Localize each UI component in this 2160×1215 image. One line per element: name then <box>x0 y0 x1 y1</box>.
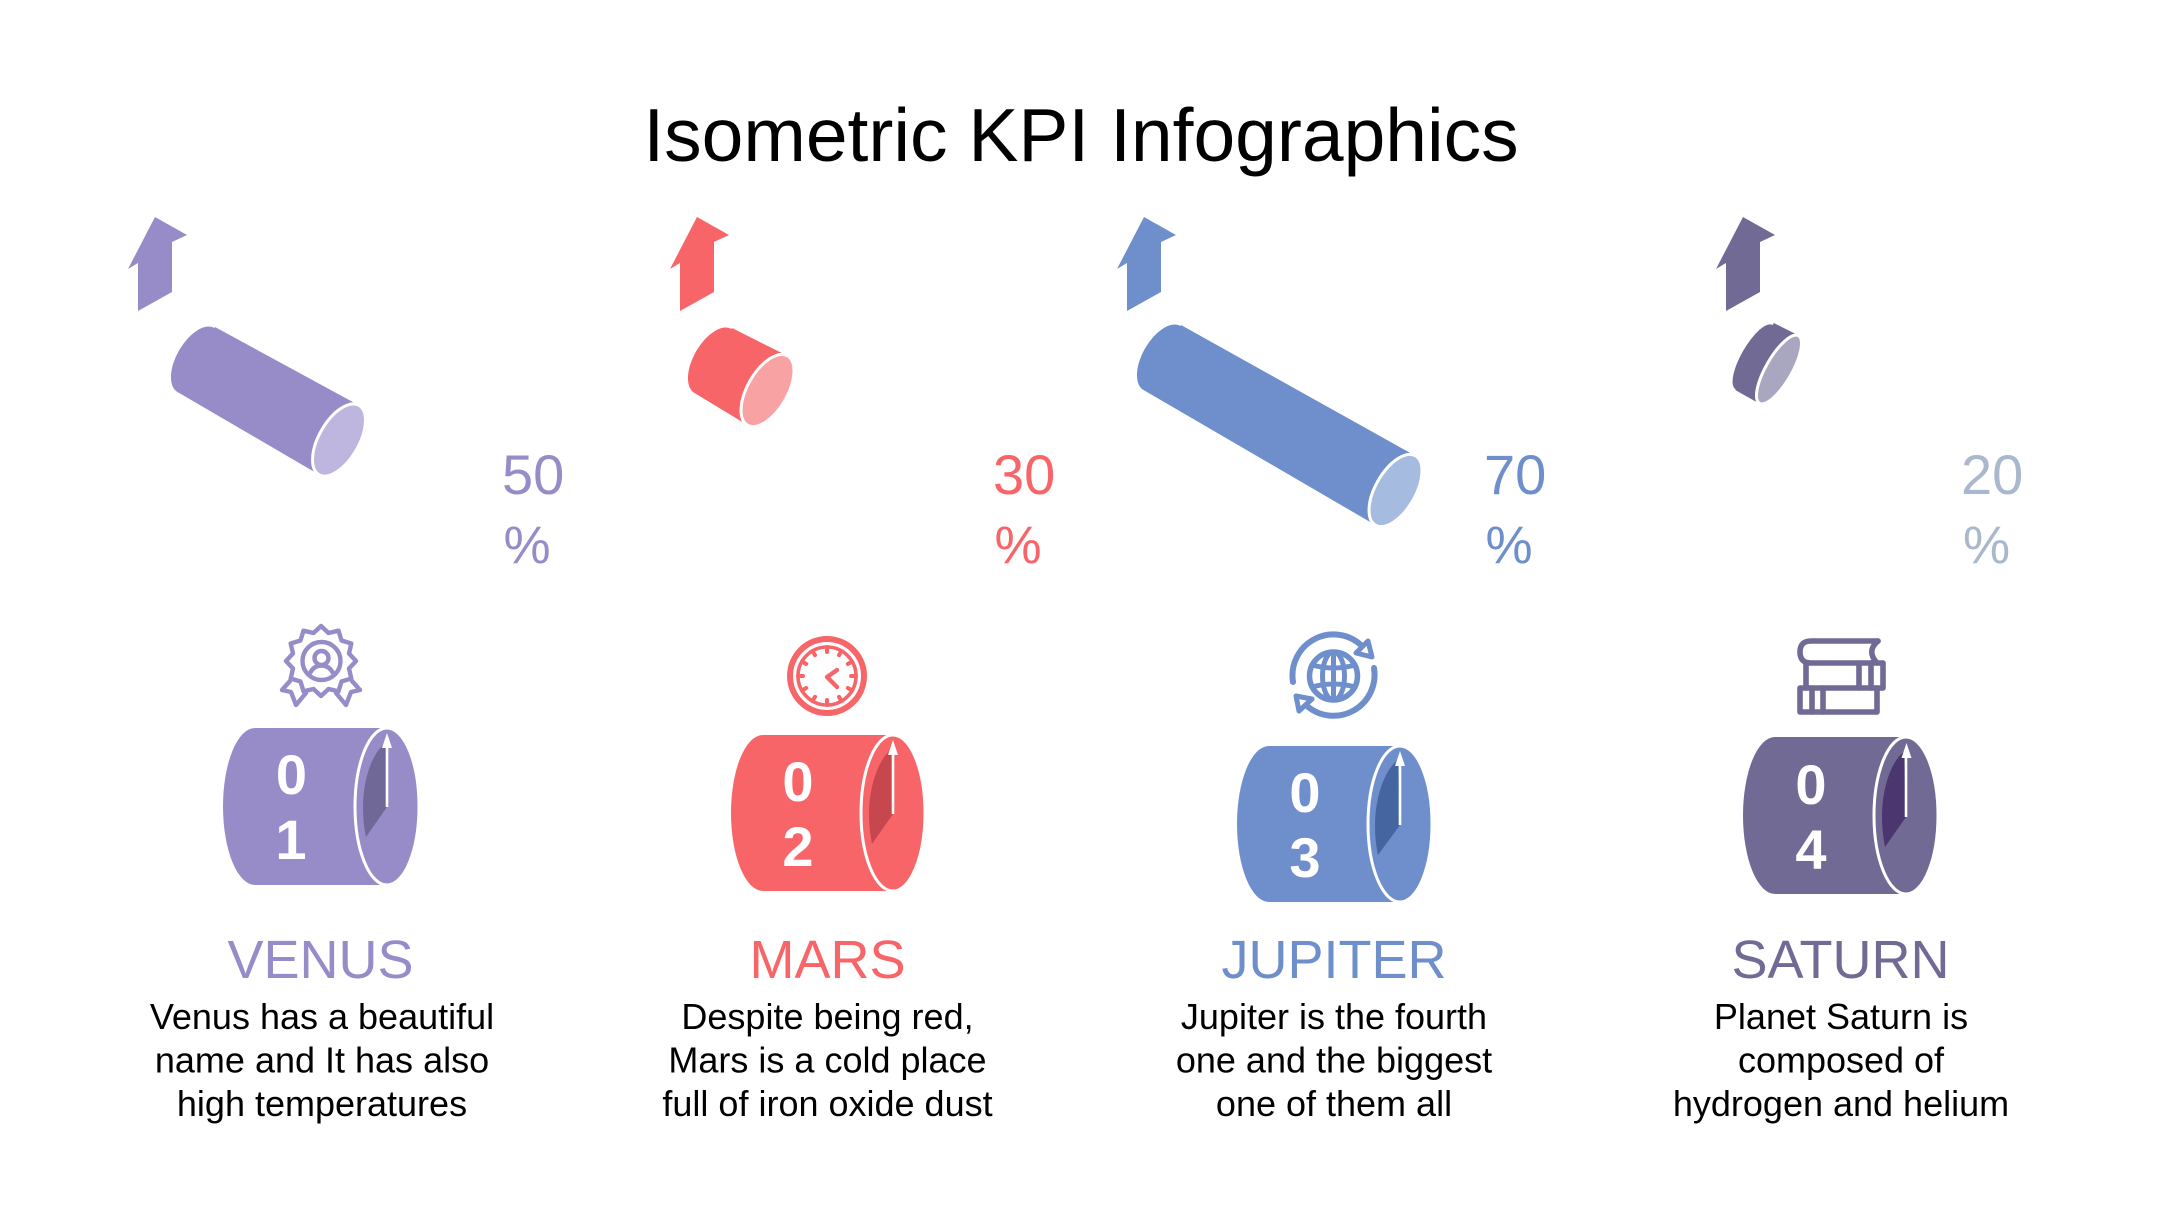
icon: globe with rotating arrows <box>1292 634 1375 716</box>
value: 50%: % <box>504 516 551 575</box>
panel: saturn KPI <box>1673 217 2023 1124</box>
text: jupiter description: one and the biggest <box>1176 1040 1492 1080</box>
icon: stack of books <box>1800 641 1883 712</box>
text: venus description: Venus has a beautiful <box>150 996 494 1037</box>
text: mars description: Mars is a cold place <box>668 1040 987 1080</box>
panel: mars KPI <box>662 217 1055 1124</box>
barrel: jupiter 03 <box>1237 746 1432 902</box>
barrel: saturn 04: 0 <box>1795 753 1827 816</box>
barrel: venus 01: 0 <box>276 743 307 806</box>
arrow: saturn up <box>1716 217 1775 311</box>
barrel: jupiter 03: 0 <box>1289 761 1321 824</box>
panel: venus KPI <box>128 217 564 1124</box>
value: 20%: % <box>1963 516 2010 575</box>
arrow: venus up <box>128 217 187 311</box>
cylinder: saturn 20 percent <box>1725 319 1810 410</box>
value: 30%: 30 <box>993 443 1055 506</box>
barrel: mars 02: 2 <box>782 815 814 878</box>
barrel: jupiter 03: 3 <box>1289 826 1321 889</box>
text: venus description: name and It has also <box>155 1040 489 1080</box>
heading: saturn: SATURN <box>1731 930 1950 990</box>
text: jupiter description: one of them all <box>1216 1083 1452 1124</box>
heading: mars: MARS <box>749 930 906 990</box>
value: 50%: 50 <box>502 443 564 506</box>
value: 70%: % <box>1486 516 1533 575</box>
text: saturn description: Planet Saturn is <box>1714 996 1968 1037</box>
barrel: saturn 04 <box>1743 737 1938 894</box>
value: 20%: 20 <box>1961 443 2023 506</box>
heading: jupiter: JUPITER <box>1221 930 1447 990</box>
panel: jupiter KPI <box>1117 217 1546 1124</box>
icon: clock <box>790 639 864 713</box>
barrel: venus 01 <box>223 728 419 885</box>
barrel: venus 01: 1 <box>275 808 307 871</box>
text: saturn description: composed of <box>1738 1040 1945 1080</box>
barrel: saturn 04: 4 <box>1795 818 1827 881</box>
text: mars description: full of iron oxide dust <box>662 1083 993 1124</box>
arrow: mars up <box>670 217 729 311</box>
title: Isometric KPI Infographics <box>643 93 1519 177</box>
icon: award badge <box>282 626 360 705</box>
heading: venus: VENUS <box>227 930 414 990</box>
cylinder: mars 30 percent <box>678 319 805 435</box>
cylinder: jupiter 70 percent <box>1127 316 1433 535</box>
barrel: mars 02 <box>731 735 925 891</box>
arrow: jupiter up <box>1117 217 1176 311</box>
cylinder: venus 50 percent <box>161 318 376 485</box>
text: saturn description: hydrogen and helium <box>1673 1083 2009 1124</box>
barrel: mars 02: 0 <box>782 750 814 813</box>
text: jupiter description: Jupiter is the fourth <box>1181 996 1487 1037</box>
value: 70%: 70 <box>1484 443 1546 506</box>
value: 30%: % <box>994 516 1042 575</box>
text: mars description: Despite being red, <box>681 996 974 1037</box>
text: venus description: high temperatures <box>177 1083 467 1124</box>
